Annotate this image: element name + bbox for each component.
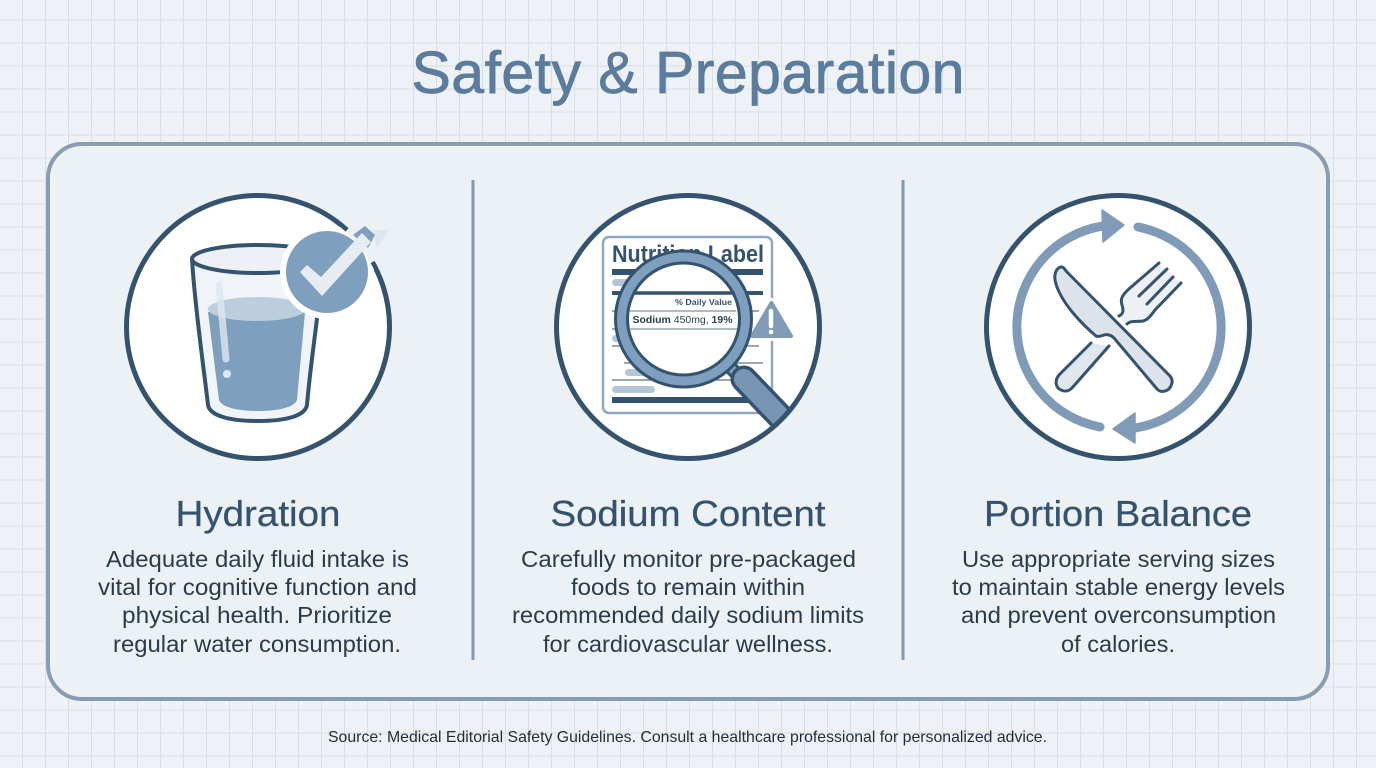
- icon: nutrition label under magnifier: Sodium 450mg, 19%: [632, 315, 733, 326]
- text: portion body: to maintain stable energy levels: [952, 574, 1285, 600]
- text: hydration body: vital for cognitive function and: [98, 574, 417, 600]
- text: hydration body: physical health. Prioritize: [122, 602, 392, 628]
- text: portion body: Use appropriate serving sizes: [962, 546, 1275, 572]
- text: sodium body: recommended daily sodium limits: [512, 602, 864, 628]
- text: sodium body: Carefully monitor pre-packaged: [521, 546, 856, 572]
- icon: water glass with check: [126, 196, 390, 458]
- heading: hydration: Hydration: [176, 493, 340, 534]
- column: portion balance: [952, 196, 1285, 657]
- icon: nutrition label under magnifier: Nutrition Label: [612, 241, 764, 268]
- source footnote: Source: Medical Editorial Safety Guidelines. Consult a healthcare professional for personalized advice.: [328, 729, 1047, 746]
- panel: main card: [48, 144, 1328, 699]
- text: portion body: of calories.: [1061, 631, 1175, 657]
- text: hydration body: Adequate daily fluid intake is: [106, 546, 409, 572]
- icon: nutrition label under magnifier: % Daily Value: [675, 297, 732, 307]
- icon: nutrition label under magnifier: [556, 196, 820, 458]
- icon: crossed knife and fork in cycle arrows: [986, 196, 1250, 458]
- heading: sodium content: Sodium Content: [550, 493, 826, 534]
- text: sodium body: for cardiovascular wellness.: [543, 631, 833, 657]
- column: sodium content: [512, 196, 864, 657]
- text: portion body: and prevent overconsumption: [961, 602, 1276, 628]
- text: hydration body: [98, 546, 417, 657]
- text: hydration body: regular water consumption.: [113, 631, 401, 657]
- text: sodium body: foods to remain within: [571, 574, 805, 600]
- text: sodium body: [512, 546, 864, 657]
- heading: portion balance: Portion Balance: [984, 493, 1252, 534]
- column: hydration: [98, 196, 417, 657]
- text: portion body: [952, 546, 1285, 657]
- title: Safety & Preparation: [412, 40, 964, 106]
